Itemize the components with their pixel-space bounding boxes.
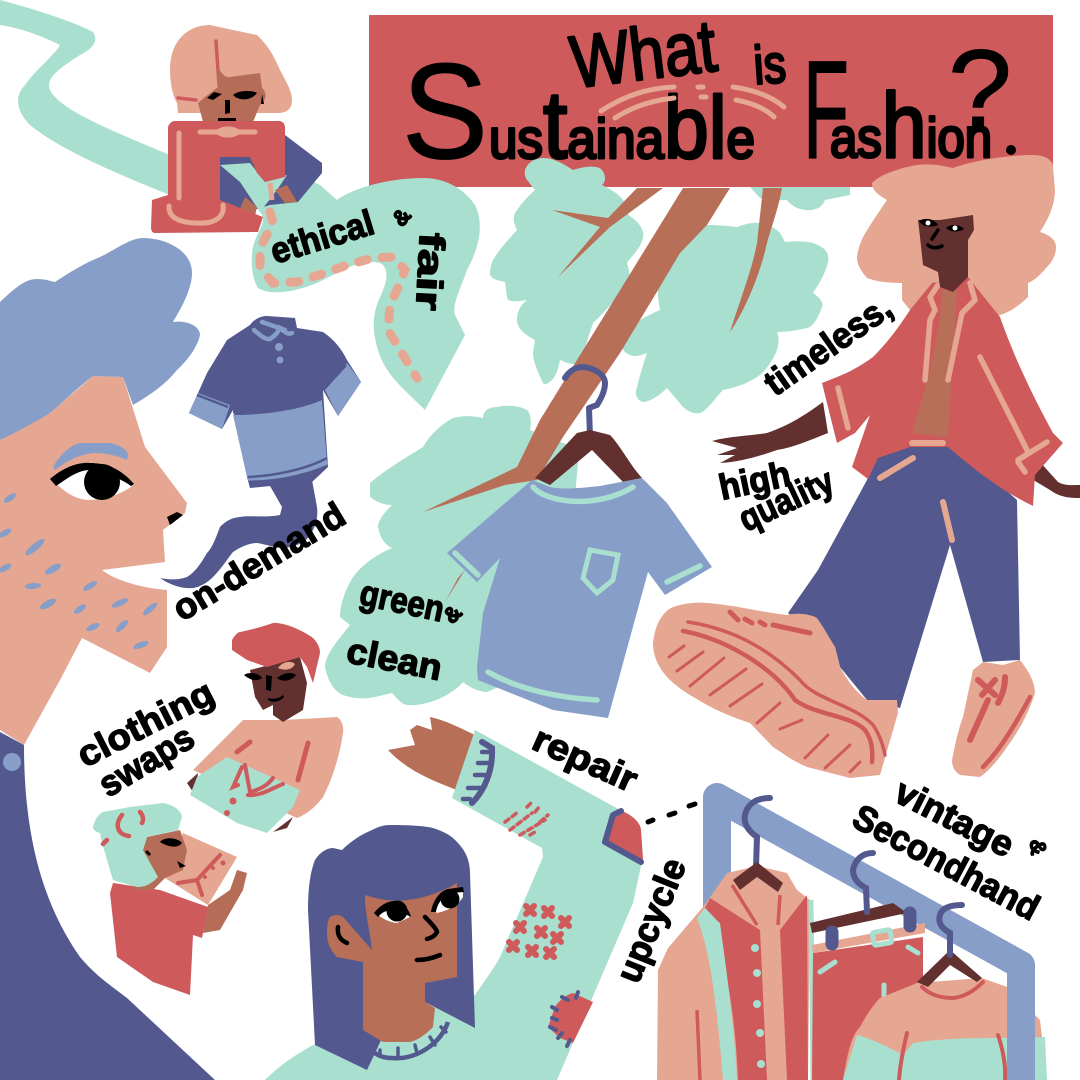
title text: F xyxy=(803,31,849,188)
tree branches xyxy=(423,188,782,512)
person with mint hair xyxy=(93,803,247,995)
hook one xyxy=(745,798,770,867)
label: vintage and secondhand: & xyxy=(1025,838,1051,856)
hair xyxy=(232,623,320,683)
jacket lapels and seams xyxy=(838,283,1047,472)
mint garment xyxy=(190,757,300,833)
connecting dots xyxy=(648,804,695,822)
arm xyxy=(203,870,247,933)
neck and face xyxy=(250,657,307,722)
hanger sweater xyxy=(917,950,982,987)
label: vintage and secondhand: Secondhand xyxy=(846,796,1046,928)
collar stitches xyxy=(367,1022,448,1058)
dot patch xyxy=(505,802,548,835)
pants xyxy=(788,437,1020,708)
collar xyxy=(254,322,292,339)
hands xyxy=(187,773,293,832)
title: Sustainable Fashion: S xyxy=(402,35,488,187)
label: on-demand: on-demand xyxy=(165,494,352,629)
rack post over sweater xyxy=(1007,965,1035,1080)
on-demand shirt genie xyxy=(160,316,361,588)
torso xyxy=(193,717,343,818)
hands xyxy=(238,185,297,216)
cuff stitches xyxy=(472,742,492,803)
title text: ashion xyxy=(830,75,992,177)
person with sewing machine xyxy=(151,25,322,233)
label: clothing swaps: clothing xyxy=(70,671,221,775)
label: green and clean: & xyxy=(438,600,467,629)
sweater xyxy=(843,978,1047,1080)
nostril xyxy=(167,512,183,525)
label: ethical and fair: fair xyxy=(408,232,453,312)
elbow patch xyxy=(605,811,643,860)
eyebrow xyxy=(53,443,128,470)
peach garment xyxy=(165,833,237,905)
hair xyxy=(0,238,200,440)
label: clothing swaps: swaps xyxy=(91,716,201,805)
hand xyxy=(388,717,475,790)
mint river xyxy=(0,0,170,195)
jacket on hanger xyxy=(657,866,810,1080)
stitched patch xyxy=(548,993,593,1043)
hair xyxy=(170,25,292,113)
face xyxy=(327,883,457,1042)
hook xyxy=(565,367,605,437)
label: high quality: high xyxy=(715,453,794,508)
title: What is: What xyxy=(566,4,721,104)
eye xyxy=(53,463,133,500)
hanger xyxy=(535,430,642,485)
ethical and fair mint path xyxy=(220,160,480,410)
title text xyxy=(402,4,1016,188)
red top xyxy=(110,883,208,995)
label: green and clean: green xyxy=(356,572,448,629)
mint fabric through machine xyxy=(220,163,287,212)
clothing rack xyxy=(657,797,1047,1080)
genie tail xyxy=(160,480,317,588)
jacket xyxy=(822,277,1063,506)
big face on left xyxy=(0,238,215,1080)
label: ethical and fair xyxy=(265,201,453,312)
hair xyxy=(857,155,1056,319)
label: ethical and fair: ethical xyxy=(265,201,379,272)
face skin xyxy=(0,376,187,745)
shirt top xyxy=(189,316,361,488)
label: upcycle: upcycle xyxy=(607,852,694,988)
hair xyxy=(93,803,182,887)
title text: ustainable xyxy=(489,72,755,179)
woman with blonde hair xyxy=(653,155,1080,778)
title text: is xyxy=(752,34,788,96)
left arm skin xyxy=(712,402,828,463)
tree foliage xyxy=(490,158,850,413)
torso xyxy=(912,290,957,437)
label: timeless: timeless, xyxy=(756,286,899,404)
title flourish xyxy=(601,87,784,118)
title text: ? xyxy=(948,27,1012,152)
face xyxy=(198,67,266,122)
hanger for trousers xyxy=(810,903,907,933)
person with red hair holding clothes xyxy=(187,623,343,833)
label: green and clean xyxy=(343,572,467,688)
face xyxy=(918,215,974,292)
freckles xyxy=(0,492,159,651)
red machine sweater xyxy=(151,121,285,233)
face xyxy=(133,830,187,890)
cross patch xyxy=(509,906,569,957)
hanger and t-shirt xyxy=(445,367,712,718)
hair xyxy=(308,825,475,1070)
mint sleeve and body xyxy=(265,730,643,1080)
title banner background xyxy=(369,15,1053,187)
right arm skin xyxy=(1030,462,1080,498)
label: green and clean: clean xyxy=(343,630,446,688)
light blue body xyxy=(233,400,327,477)
trousers xyxy=(812,937,923,1080)
label: repair: repair xyxy=(527,718,644,800)
label: high quality: quality xyxy=(732,460,840,539)
shirt xyxy=(447,478,712,718)
navy body xyxy=(0,732,215,1080)
twig under speech xyxy=(445,570,465,602)
small shoe xyxy=(952,660,1035,777)
person with navy hair and mended sleeve xyxy=(265,717,643,1080)
eyes xyxy=(375,902,410,923)
big shoe sole xyxy=(653,603,898,778)
label: vintage and secondhand: vintage xyxy=(888,771,1021,865)
navy arms xyxy=(220,135,322,215)
hanger one xyxy=(733,862,783,892)
label: ethical and fair: & xyxy=(387,203,416,231)
stitched line xyxy=(260,212,417,378)
tree bush lower xyxy=(325,406,578,705)
